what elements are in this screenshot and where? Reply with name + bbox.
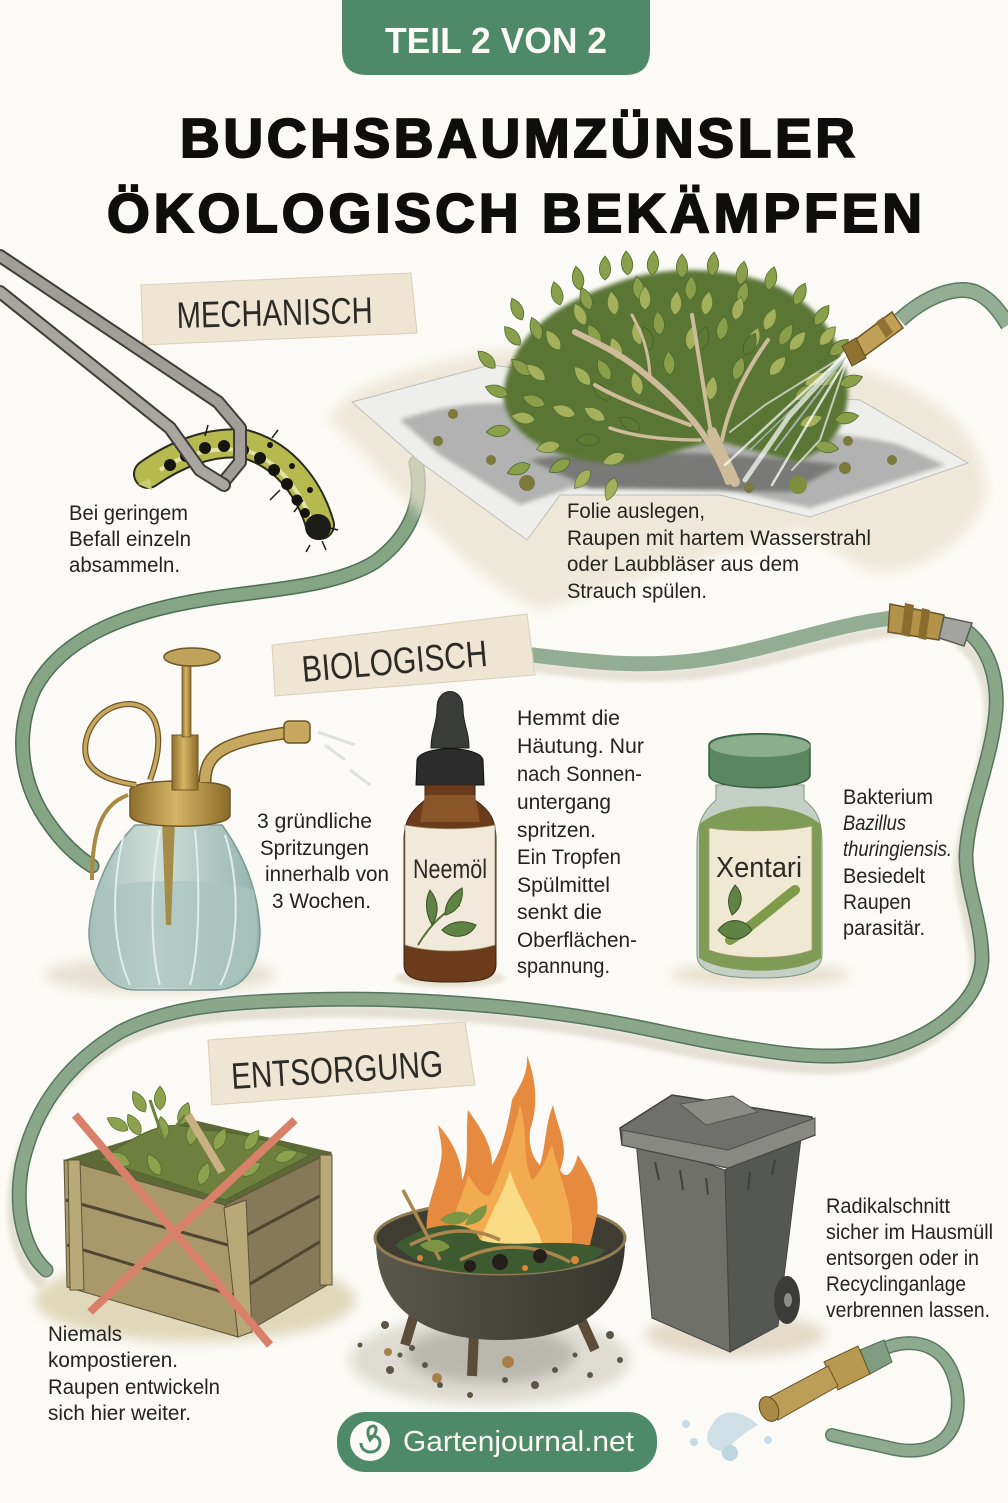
- icon: hose end with brass nozzle and water: [682, 1340, 958, 1461]
- text: Radikalschnitt: [826, 1195, 993, 1322]
- text: Niemals kompostieren: Raupen entwickeln: [48, 1376, 220, 1399]
- text: Bei geringem Befall: Bei geringem: [69, 502, 188, 525]
- text: Bakterium Bazillus: Bakterium: [843, 786, 933, 809]
- icon: Xentari jar: [670, 734, 850, 987]
- top badge: Teil 2 von 2: TEIL 2 VON 2: [385, 20, 607, 61]
- icon: dark grey waste bin: [620, 1095, 825, 1357]
- branches: [575, 315, 768, 482]
- icon: brass pump sprayer: [45, 648, 370, 993]
- icon: crossed-out compost crate: [35, 1086, 355, 1345]
- text: Bakterium Bazillus: Bazillus: [843, 812, 906, 835]
- title: BUCHSBAUMZÜNSLER: [180, 107, 855, 169]
- text: Hemmt die Häutung: Hemmt die: [517, 707, 620, 730]
- hose: top right with nozzle: [842, 290, 1008, 366]
- text: Bakterium Bazillus: Besiedelt: [843, 865, 925, 888]
- icon: caterpillar: [138, 425, 338, 552]
- text: Hemmt die Häutung: spritzen.: [517, 819, 596, 842]
- title: [107, 107, 922, 244]
- panel: entsorgung: [35, 1022, 993, 1461]
- text: Hemmt die Häutung: Oberflächen-: [517, 929, 637, 952]
- icon: Neemöl dropper bottle: [395, 692, 505, 987]
- text: Radikalschnitt: sicher im Hausmüll: [826, 1221, 993, 1244]
- text: 3 gründliche Spritzungen: [257, 810, 389, 913]
- title: ÖKOLOGISCH BEKÄMPFEN: [107, 182, 922, 244]
- text: Bakterium Bazillus: thuringiensis.: [843, 838, 952, 861]
- icon: Xentari jar: Xentari: [716, 852, 802, 884]
- icon: Neemöl dropper bottle: Neemöl: [413, 854, 487, 884]
- text: Bakterium Bazillus: [843, 786, 952, 940]
- illustration: boxwood on foil with water jet: [330, 251, 1008, 610]
- text: Niemals kompostieren: [48, 1323, 220, 1425]
- heading label: Mechanisch: MECHANISCH: [176, 290, 373, 336]
- text: Hemmt die Häutung: Spülmittel: [517, 874, 610, 897]
- text: 3 gründliche Spritzungen: 3 Wochen.: [272, 890, 371, 913]
- foil sheet: [352, 365, 968, 540]
- text: Niemals kompostieren: Niemals: [48, 1323, 122, 1346]
- ground wash: [330, 350, 985, 610]
- heading label: Biologisch: [272, 614, 535, 696]
- text: 3 gründliche Spritzungen: 3 gründliche: [257, 810, 372, 833]
- heading label: Mechanisch: [141, 273, 417, 345]
- text: Radikalschnitt: Recyclinganlage: [826, 1273, 966, 1296]
- text: Hemmt die Häutung: spannung.: [517, 955, 610, 978]
- text: Hemmt die Häutung: Ein Tropfen: [517, 846, 621, 869]
- text: Hemmt die Häutung: nach Sonnen-: [517, 763, 642, 786]
- text: 3 gründliche Spritzungen: Spritzungen: [260, 837, 369, 860]
- text: Hemmt die Häutung: [517, 707, 644, 978]
- icon: logo sprout: [350, 1421, 390, 1461]
- heading label: Biologisch: BIOLOGISCH: [300, 633, 489, 690]
- text: Hemmt die Häutung: untergang: [517, 791, 611, 814]
- text: Niemals kompostieren: kompostieren.: [48, 1349, 178, 1372]
- hose coupling: brass connector: [888, 603, 972, 646]
- text: Folie auslegen: oder Laubbläser aus dem: [567, 553, 799, 576]
- text: Radikalschnitt: Radikalschnitt: [826, 1195, 950, 1218]
- water jet: [725, 355, 848, 485]
- text: Bei geringem Befall: [69, 502, 191, 577]
- foliage mass: [503, 270, 848, 463]
- leaves: [474, 251, 864, 502]
- text: Bei geringem Befall: absammeln.: [69, 554, 180, 577]
- text: Bakterium Bazillus: parasitär.: [843, 917, 925, 940]
- panel: biologisch: [45, 614, 952, 993]
- panel: mechanisch: [0, 256, 417, 577]
- footer badge: Gartenjournal.net: [337, 1412, 657, 1472]
- heading label: Entsorgung: [208, 1022, 475, 1105]
- garden hose: middle and right loop: [13, 618, 996, 1282]
- foil shadow and debris: [400, 403, 945, 508]
- heading label: Entsorgung: ENTSORGUNG: [230, 1043, 444, 1097]
- garden hose: lower left to sprayer: [23, 463, 418, 866]
- text: Folie auslegen: Folie auslegen,: [567, 500, 705, 523]
- text: Bakterium Bazillus: Raupen: [843, 891, 911, 914]
- text: 3 gründliche Spritzungen: innerhalb von: [265, 863, 389, 886]
- icon: tweezers: [0, 256, 240, 485]
- text: Radikalschnitt: verbrennen lassen.: [826, 1299, 990, 1322]
- brand name: Gartenjournal.net: [403, 1426, 634, 1458]
- text: Radikalschnitt: entsorgen oder in: [826, 1247, 979, 1270]
- text: Folie auslegen: Raupen mit hartem Wasserstrahl: [567, 527, 871, 550]
- top badge: Teil 2 von 2: [342, 0, 650, 75]
- text: Folie auslegen: [567, 500, 871, 603]
- icon: fire bowl with flames: [350, 1055, 630, 1405]
- text: Hemmt die Häutung: Häutung. Nur: [517, 735, 644, 758]
- text: Hemmt die Häutung: senkt die: [517, 901, 602, 924]
- text: Bei geringem Befall: Befall einzeln: [69, 528, 191, 551]
- text: Niemals kompostieren: sich hier weiter.: [48, 1402, 191, 1425]
- text: Folie auslegen: Strauch spülen.: [567, 580, 707, 603]
